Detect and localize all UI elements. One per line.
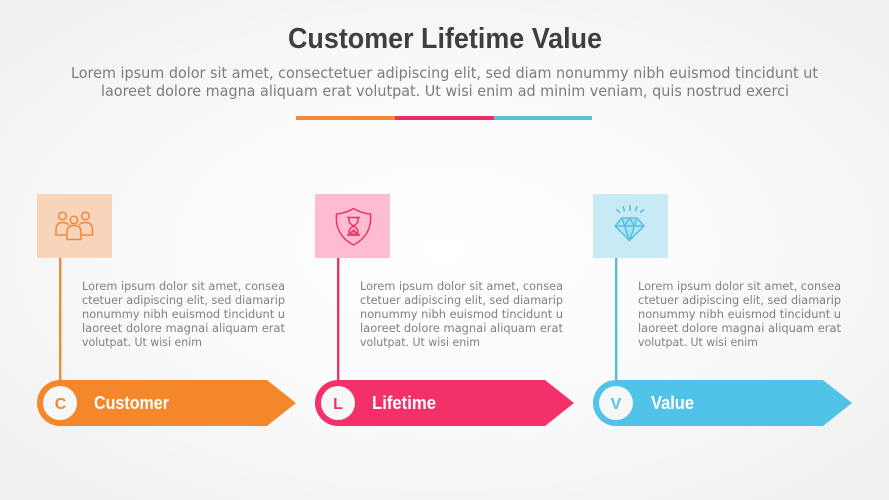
body text [360,279,564,349]
subtitle text [71,64,818,100]
arrow banner [593,380,852,426]
subtitle text: laoreet dolore magna aliquam erat volutpat. Ut wisi enim ad minim veniam, quis nostrud exerci [101,82,789,100]
label: Lifetime [372,393,436,413]
body text: volutpat. Ut wisi enim [638,335,758,349]
letter circle [43,386,77,420]
body text: nonummy nibh euismod tincidunt u [82,307,285,321]
label: Value [651,393,694,413]
body text: Lorem ipsum dolor sit amet, consea [360,279,563,293]
body text [82,279,286,349]
connector line [337,258,339,381]
letter: L [333,396,343,413]
panel: customer [37,194,296,426]
body text: ctetuer adipiscing elit, sed diamarip [360,293,563,307]
icon: people [56,212,92,240]
connector line [615,258,617,381]
subtitle text: Lorem ipsum dolor sit amet, consectetuer adipiscing elit, sed diam nonummy nibh euismod tincidunt ut [71,64,818,82]
body text: nonummy nibh euismod tincidunt u [360,307,563,321]
letter: C [55,396,67,413]
icon: shield hourglass [336,208,371,245]
body text: Lorem ipsum dolor sit amet, consea [82,279,285,293]
arrow banner [315,380,574,426]
panel: value [593,194,852,426]
label: Customer [94,393,169,413]
body text [638,279,842,349]
arrow banner [37,380,296,426]
letter circle [321,386,355,420]
body text: volutpat. Ut wisi enim [360,335,480,349]
icon box: value [593,194,668,258]
letter circle [599,386,633,420]
icon box: customer [37,194,112,258]
tri-colour divider [296,116,592,120]
connector line [59,258,61,381]
icon: diamond [615,205,644,240]
body text: Lorem ipsum dolor sit amet, consea [638,279,841,293]
icon box: lifetime [315,194,390,258]
body text: nonummy nibh euismod tincidunt u [638,307,841,321]
title: Customer Lifetime Value [288,23,602,55]
body text: volutpat. Ut wisi enim [82,335,202,349]
body text: laoreet dolore magnai aliquam erat [638,321,842,335]
body text: ctetuer adipiscing elit, sed diamarip [82,293,285,307]
panel: lifetime [315,194,574,426]
body text: laoreet dolore magnai aliquam erat [82,321,286,335]
body text: laoreet dolore magnai aliquam erat [360,321,564,335]
body text: ctetuer adipiscing elit, sed diamarip [638,293,841,307]
letter: V [611,396,622,413]
